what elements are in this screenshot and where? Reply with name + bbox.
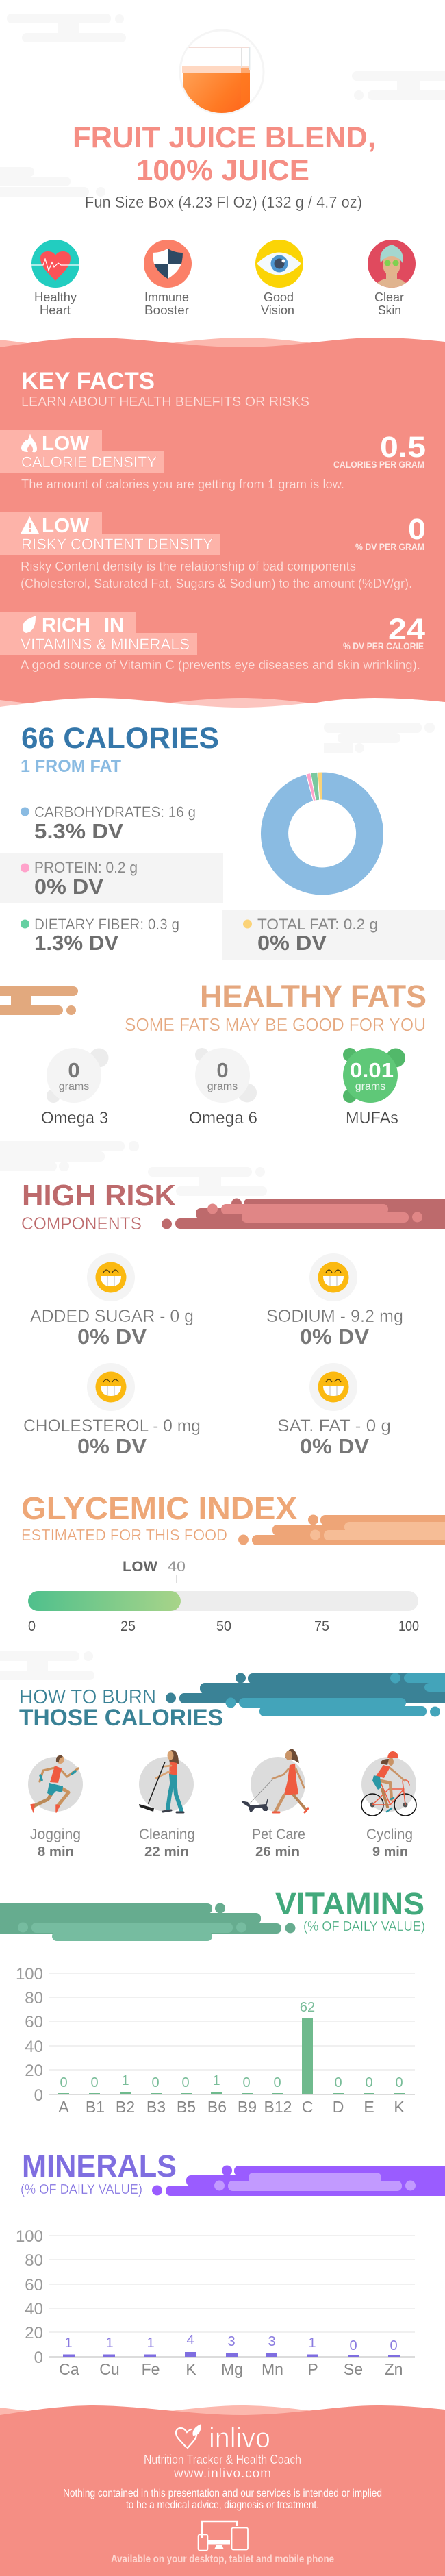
- panel: healthy fats: [0, 979, 427, 1127]
- gauge: axis labels: 0: [28, 1618, 36, 1634]
- title: FRUIT JUICE BLEND,: [73, 121, 376, 154]
- decorative header shape: [162, 1199, 445, 1229]
- fact: risky content density: Risky Content density is the relationship of bad components: [21, 560, 356, 573]
- fact: calorie density: The amount of calories you are getting from 1 gram is low.: [21, 477, 344, 491]
- bar chart: minerals: P: [307, 2360, 318, 2378]
- decorative header shape: [166, 1673, 445, 1716]
- bar chart: vitamins: 100: [16, 1965, 43, 1984]
- disclaimer: Nothing contained in this presentation and our services is intended or implied: [63, 2488, 382, 2499]
- panel: calories: [0, 722, 445, 960]
- sodium: SODIUM - 9.2 mg: [266, 1307, 403, 1326]
- activity: cycling: 9 min: [372, 1845, 408, 1860]
- icon: person sweeping: [139, 1750, 194, 1812]
- icon: healthy heart: Healthy: [34, 290, 77, 304]
- heading: [125, 979, 427, 1035]
- gauge: axis labels: 50: [216, 1618, 231, 1634]
- mufas: 0.01: [350, 1058, 394, 1082]
- logo: inlivo: [176, 2422, 270, 2453]
- bar chart: minerals: 1: [105, 2336, 114, 2351]
- panel: minerals: [16, 2149, 445, 2378]
- decorative header shape: [0, 1903, 296, 1941]
- omega 3: 0: [68, 1058, 80, 1082]
- gauge: axis labels: 75: [314, 1618, 329, 1634]
- bar chart: vitamins: D: [333, 2098, 344, 2116]
- heading: 1 FROM FAT: [21, 757, 121, 776]
- disclaimer: [63, 2488, 382, 2511]
- heading: KEY FACTS: [21, 368, 155, 395]
- bar chart: minerals: Zn: [385, 2360, 403, 2378]
- heading: [21, 1179, 176, 1234]
- heading: VITAMINS: [275, 1886, 424, 1921]
- fact: rich in vitamins and minerals: RICH: [42, 614, 90, 636]
- heading: [21, 2149, 177, 2197]
- bar chart: minerals: 3: [268, 2334, 276, 2349]
- legend: dietary fiber: DIETARY FIBER: 0.3 g: [34, 916, 179, 933]
- fact: calorie density: 0.5: [380, 431, 426, 464]
- icon: jogger: [28, 1755, 83, 1812]
- cholesterol: [23, 1363, 201, 1458]
- title: [73, 121, 376, 187]
- bar chart: minerals: 3: [227, 2334, 236, 2349]
- bar chart: vitamins: 40: [25, 2038, 43, 2056]
- icon: leaf: [23, 616, 36, 633]
- sodium: 0% DV: [300, 1325, 369, 1349]
- bar chart: minerals: Ca: [59, 2360, 79, 2378]
- gauge: value label: LOW: [123, 1559, 157, 1575]
- legend: dietary fiber: [21, 916, 179, 955]
- bar chart: minerals: 1: [64, 2336, 73, 2351]
- bar chart: vitamins: 0: [181, 2075, 190, 2090]
- bar chart: minerals: K: [186, 2360, 196, 2378]
- heading: SOME FATS MAY BE GOOD FOR YOU: [125, 1014, 426, 1035]
- footer: [0, 2405, 445, 2576]
- gauge: value label: [123, 1559, 186, 1583]
- icon: smiley: [87, 1363, 135, 1411]
- bar chart: vitamins: K: [394, 2098, 405, 2116]
- bar chart: vitamins: B2: [116, 2098, 135, 2116]
- gauge: axis labels: 25: [120, 1618, 136, 1634]
- heading: [21, 722, 219, 776]
- bar chart: minerals: Se: [344, 2360, 363, 2378]
- bar chart: minerals: Mg: [221, 2360, 243, 2378]
- bar chart: vitamins: 20: [25, 2062, 43, 2080]
- bar chart: vitamins: 0: [334, 2075, 342, 2090]
- fact: calorie density: CALORIE DENSITY: [21, 453, 157, 471]
- legend: carbohydrates: 5.3% DV: [34, 819, 123, 843]
- fact: calorie density: CALORIES PER GRAM: [333, 460, 424, 470]
- added sugar: ADDED SUGAR - 0 g: [30, 1307, 194, 1326]
- fact: rich in vitamins and minerals: IN: [104, 614, 124, 636]
- icon: clear skin: [368, 240, 416, 317]
- fact: rich in vitamins and minerals: VITAMINS & MINERALS: [21, 636, 190, 653]
- icon: devices: [199, 2521, 248, 2551]
- icon: smiley: [309, 1253, 357, 1301]
- activity: cleaning: [139, 1750, 195, 1860]
- icon: immune booster: Booster: [144, 303, 189, 317]
- activity: pet care: 26 min: [255, 1845, 300, 1860]
- legend: total fat: TOTAL FAT: 0.2 g: [257, 916, 378, 933]
- legend: total fat: [222, 910, 445, 960]
- legend: protein: PROTEIN: 0.2 g: [34, 859, 138, 876]
- heading: ESTIMATED FOR THIS FOOD: [21, 1526, 227, 1544]
- bar chart: minerals: Cu: [99, 2360, 120, 2378]
- heading: [21, 1490, 297, 1544]
- icon: healthy heart: [31, 240, 79, 317]
- bar chart: vitamins: 0: [242, 2075, 251, 2090]
- omega 3: Omega 3: [41, 1109, 108, 1127]
- icon: flame: [21, 434, 37, 452]
- bar chart: vitamins: B6: [207, 2098, 227, 2116]
- fact: rich in vitamins and minerals: A good source of Vitamin C (prevents eye diseases and skin wrinkling).: [21, 658, 420, 672]
- panel: glycemic index: [21, 1490, 445, 1634]
- panel: vitamins: [0, 1886, 425, 2116]
- icon: person walking dog: [241, 1749, 308, 1812]
- fact: calorie density: [0, 430, 426, 491]
- bar chart: vitamins: B3: [147, 2098, 166, 2116]
- bar chart: vitamins: B12: [264, 2098, 292, 2116]
- fact: risky content density: (Cholesterol, Saturated Fat, Sugars & Sodium) to the amount (%DV/gr).: [21, 577, 412, 590]
- panel: key facts: [0, 338, 445, 708]
- saturated fat: 0% DV: [300, 1434, 369, 1458]
- bar chart: minerals: 0: [390, 2338, 398, 2353]
- icon: warning triangle: [21, 516, 39, 534]
- icon: cyclist: [361, 1751, 416, 1816]
- cholesterol: 0% DV: [77, 1434, 147, 1458]
- icon: good vision: Vision: [261, 303, 294, 317]
- legend: carbohydrates: CARBOHYDRATES: 16 g: [34, 803, 196, 821]
- heading: (% OF DAILY VALUE): [303, 1919, 425, 1934]
- website link: www.inlivo.com: [173, 2466, 271, 2481]
- legend: carbohydrates: [21, 803, 196, 843]
- mufas: grams: [355, 1081, 385, 1092]
- omega 6: 0: [216, 1058, 229, 1082]
- fact: risky content density: [0, 512, 426, 590]
- logo: inlivo: inlivo: [209, 2422, 270, 2453]
- fact: risky content density: LOW: [42, 515, 90, 537]
- saturated fat: SAT. FAT - 0 g: [277, 1416, 391, 1436]
- heading: (% OF DAILY VALUE): [21, 2182, 142, 2197]
- fact: calorie density: LOW: [42, 433, 90, 455]
- sodium: [266, 1253, 403, 1349]
- header: food image and title: [73, 30, 376, 211]
- gauge: value label: 40: [168, 1559, 186, 1575]
- icon: smiley: [87, 1253, 135, 1301]
- legend: total fat: 0% DV: [257, 931, 327, 955]
- tagline: Nutrition Tracker & Health Coach: [144, 2453, 301, 2466]
- icon: good vision: [255, 240, 303, 317]
- bar chart: minerals: [16, 2227, 415, 2378]
- bar chart: vitamins: B5: [177, 2098, 196, 2116]
- omega 3: grams: [59, 1081, 89, 1092]
- icon: clear skin: Clear: [374, 290, 404, 304]
- health benefit icons row: [31, 240, 416, 317]
- activity: pet care: Pet Care: [252, 1827, 305, 1842]
- mufas: [343, 1048, 405, 1127]
- bar chart: vitamins: [16, 1965, 415, 2116]
- activity: pet care: [241, 1749, 308, 1860]
- heading: [21, 368, 309, 410]
- icon: glass of orange juice: [180, 30, 264, 116]
- bar chart: minerals: Fe: [142, 2360, 160, 2378]
- bar chart: minerals: Mn: [262, 2360, 283, 2378]
- added sugar: 0% DV: [77, 1325, 147, 1349]
- omega 3: [41, 1048, 108, 1127]
- icon: clear skin: Skin: [378, 303, 401, 317]
- bar chart: vitamins: 0: [60, 2075, 68, 2090]
- bar chart: minerals: 1: [308, 2336, 316, 2351]
- activity: cleaning: Cleaning: [139, 1827, 195, 1842]
- availability note: Available on your desktop, tablet and mobile phone: [111, 2553, 334, 2565]
- fact: risky content density: RISKY CONTENT DENSITY: [21, 536, 213, 553]
- heading: MINERALS: [22, 2149, 177, 2184]
- omega 6: [189, 1048, 257, 1127]
- bar chart: vitamins: 0: [273, 2075, 281, 2090]
- bar chart: vitamins: 80: [25, 1989, 43, 2008]
- title: 100% JUICE: [136, 154, 309, 187]
- heading: LEARN ABOUT HEALTH BENEFITS OR RISKS: [21, 394, 309, 410]
- decorative header shape: [152, 2166, 445, 2196]
- saturated fat: [277, 1363, 391, 1458]
- bar chart: minerals: 20: [25, 2324, 43, 2342]
- heading: HOW TO BURN: [19, 1686, 156, 1708]
- bar chart: vitamins: B1: [86, 2098, 105, 2116]
- bar chart: vitamins: 60: [25, 2013, 43, 2031]
- icon: good vision: Good: [264, 290, 294, 304]
- heading: GLYCEMIC INDEX: [21, 1490, 297, 1526]
- bar chart: vitamins: C: [302, 2098, 313, 2116]
- bar chart: minerals: 4: [186, 2333, 194, 2348]
- serving size subtitle: Fun Size Box (4.23 Fl Oz) (132 g / 4.7 oz): [85, 193, 362, 211]
- omega 6: Omega 6: [189, 1109, 257, 1127]
- bar chart: vitamins: 0: [34, 2086, 43, 2105]
- icon: smiley: [309, 1363, 357, 1411]
- bar chart: vitamins: 0: [151, 2075, 160, 2090]
- fact: rich in vitamins and minerals: % DV PER CALORIE: [343, 641, 424, 651]
- heading: COMPONENTS: [21, 1214, 142, 1234]
- heading: 66 CALORIES: [21, 722, 219, 755]
- activity: cycling: [361, 1751, 416, 1860]
- bar chart: vitamins: 0: [90, 2075, 99, 2090]
- heading: THOSE CALORIES: [19, 1705, 223, 1731]
- activity: jogging: [28, 1755, 83, 1860]
- bar chart: minerals: 40: [25, 2300, 43, 2318]
- fact: rich in vitamins and minerals: [0, 612, 425, 672]
- added sugar: [30, 1253, 194, 1349]
- legend: dietary fiber: 1.3% DV: [34, 931, 118, 955]
- bar chart: minerals: 80: [25, 2251, 43, 2270]
- decorative header shape: [0, 986, 78, 1015]
- bar chart: vitamins: 1: [121, 2073, 129, 2088]
- bar chart: vitamins: 0: [365, 2075, 373, 2090]
- heading: HIGH RISK: [22, 1179, 176, 1212]
- gauge: axis labels: [28, 1618, 419, 1634]
- disclaimer: to be a medical advice, diagnosis or treatment.: [126, 2499, 319, 2511]
- legend: protein: 0% DV: [34, 875, 103, 899]
- bar chart: vitamins: 62: [300, 2000, 315, 2015]
- cholesterol: CHOLESTEROL - 0 mg: [23, 1416, 201, 1436]
- bar chart: vitamins: A: [58, 2098, 69, 2116]
- bar chart: vitamins: 1: [212, 2073, 220, 2088]
- bar chart: minerals: 60: [25, 2276, 43, 2294]
- mufas: MUFAs: [346, 1109, 398, 1127]
- donut chart: [261, 772, 384, 895]
- bar chart: minerals: 100: [16, 2227, 43, 2246]
- icon: healthy heart: Heart: [40, 303, 71, 317]
- activity: cycling: Cycling: [366, 1827, 413, 1842]
- bar chart: vitamins: 0: [395, 2075, 403, 2090]
- heading: HEALTHY FATS: [200, 979, 427, 1014]
- fact: risky content density: 0: [408, 513, 426, 546]
- bar chart: vitamins: E: [364, 2098, 374, 2116]
- bar chart: minerals: 0: [34, 2349, 43, 2367]
- omega 6: grams: [207, 1081, 238, 1092]
- fact: risky content density: % DV PER GRAM: [355, 542, 424, 552]
- icon: immune booster: [144, 240, 192, 317]
- icon: immune booster: Immune: [144, 290, 189, 304]
- panel: how to burn those calories: [19, 1673, 445, 1860]
- activity: jogging: Jogging: [30, 1827, 81, 1842]
- bar chart: minerals: 1: [147, 2336, 155, 2351]
- decorative header shape: [238, 1515, 445, 1545]
- heading: [19, 1686, 223, 1731]
- legend: protein: [0, 853, 223, 903]
- bar chart: minerals: 0: [349, 2338, 357, 2353]
- fact: rich in vitamins and minerals: 24: [388, 613, 425, 646]
- bar chart: vitamins: B9: [238, 2098, 257, 2116]
- panel: high risk components: [21, 1179, 445, 1458]
- activity: cleaning: 22 min: [144, 1845, 189, 1860]
- gauge: bar: [28, 1591, 418, 1611]
- activity: jogging: 8 min: [38, 1845, 74, 1860]
- gauge: axis labels: 100: [398, 1618, 419, 1634]
